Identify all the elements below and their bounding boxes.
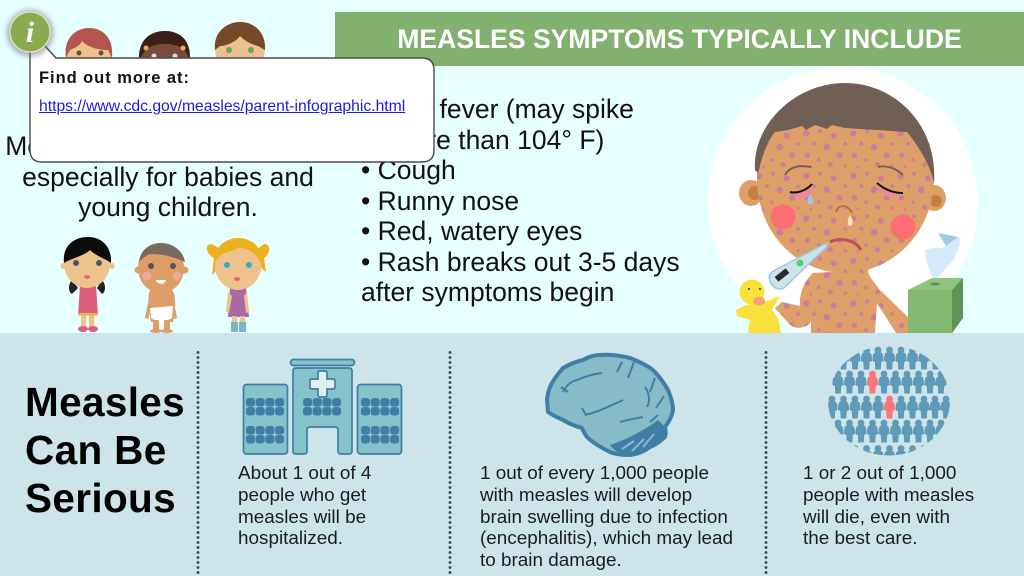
callout link: https://www.cdc.gov/measles/parent-infographic.html: [39, 98, 405, 115]
text: hospitalized statistic: About 1 out of 4: [238, 463, 371, 484]
text: symptom list: • High fever (may spike: [361, 94, 634, 124]
text: symptom list: to more than 104° F): [361, 124, 604, 154]
text: brain swelling statistic: [480, 463, 733, 571]
child: blonde girl in purple dress: [207, 238, 269, 332]
text: brain swelling statistic: brain swelling due to infection: [480, 507, 728, 528]
text: brain swelling statistic: to brain damage.: [480, 550, 622, 571]
icon: info button: [4, 6, 56, 60]
text: symptom list: • Red, watery eyes: [361, 216, 582, 246]
tissue box: [908, 233, 963, 333]
text: symptom list: • Runny nose: [361, 186, 519, 216]
text: brain swelling statistic: with measles will develop: [480, 485, 692, 506]
rubber duck: [736, 280, 781, 333]
child: girl in pink dress: [60, 237, 114, 332]
heading: measles can be serious: [25, 379, 185, 521]
heading banner: measles symptoms: [335, 12, 1024, 66]
illustration: children peeking above callout: [66, 22, 266, 58]
text: symptom list: • Rash breaks out 3-5 days: [361, 246, 680, 276]
text: hospitalized statistic: hospitalized.: [238, 528, 343, 549]
text: hospitalized statistic: measles will be: [238, 507, 366, 528]
heading: measles can be serious: Measles: [25, 379, 185, 425]
icon: info button: i: [26, 16, 35, 49]
text: death statistic: will die, even with: [803, 507, 950, 528]
text: brain swelling statistic: (encephalitis), which may lead: [480, 528, 733, 549]
text: symptom list: after symptoms begin: [361, 277, 614, 307]
body: [775, 270, 909, 333]
panel: bottom serious complications: [0, 333, 1024, 576]
text: measles can be dangerous: [5, 131, 331, 222]
text: measles can be dangerous: young children.: [78, 192, 258, 222]
text: brain swelling statistic: 1 out of every 1,000 people: [480, 463, 709, 484]
text: symptom list: [361, 94, 680, 307]
text: hospitalized statistic: [238, 463, 371, 549]
text: measles can be dangerous: especially for babies and: [22, 162, 314, 192]
text: death statistic: 1 or 2 out of 1,000: [803, 463, 956, 484]
head: [739, 83, 946, 273]
heading banner: measles symptoms: MEASLES SYMPTOMS TYPICALLY INCLUDE: [397, 24, 962, 54]
text: hospitalized statistic: people who get: [238, 485, 366, 506]
icon: crowd of people with two highlighted: [828, 346, 950, 456]
child: baby in diaper: [134, 243, 188, 333]
illustration: sick child with rash: [708, 67, 978, 333]
heading: measles can be serious: Serious: [25, 475, 176, 521]
text: death statistic: [803, 463, 974, 549]
callout heading: Find out more at:: [39, 69, 190, 87]
text: death statistic: the best care.: [803, 528, 917, 549]
text: measles can be dangerous: Measles can be dangerous,: [5, 131, 331, 161]
text: symptom list: • Cough: [361, 155, 456, 185]
illustration: three children: [60, 237, 270, 333]
callout: find out more: [29, 46, 435, 163]
thermometer: [769, 243, 828, 289]
text: death statistic: people with measles: [803, 485, 974, 506]
heading: measles can be serious: Can Be: [25, 427, 167, 473]
